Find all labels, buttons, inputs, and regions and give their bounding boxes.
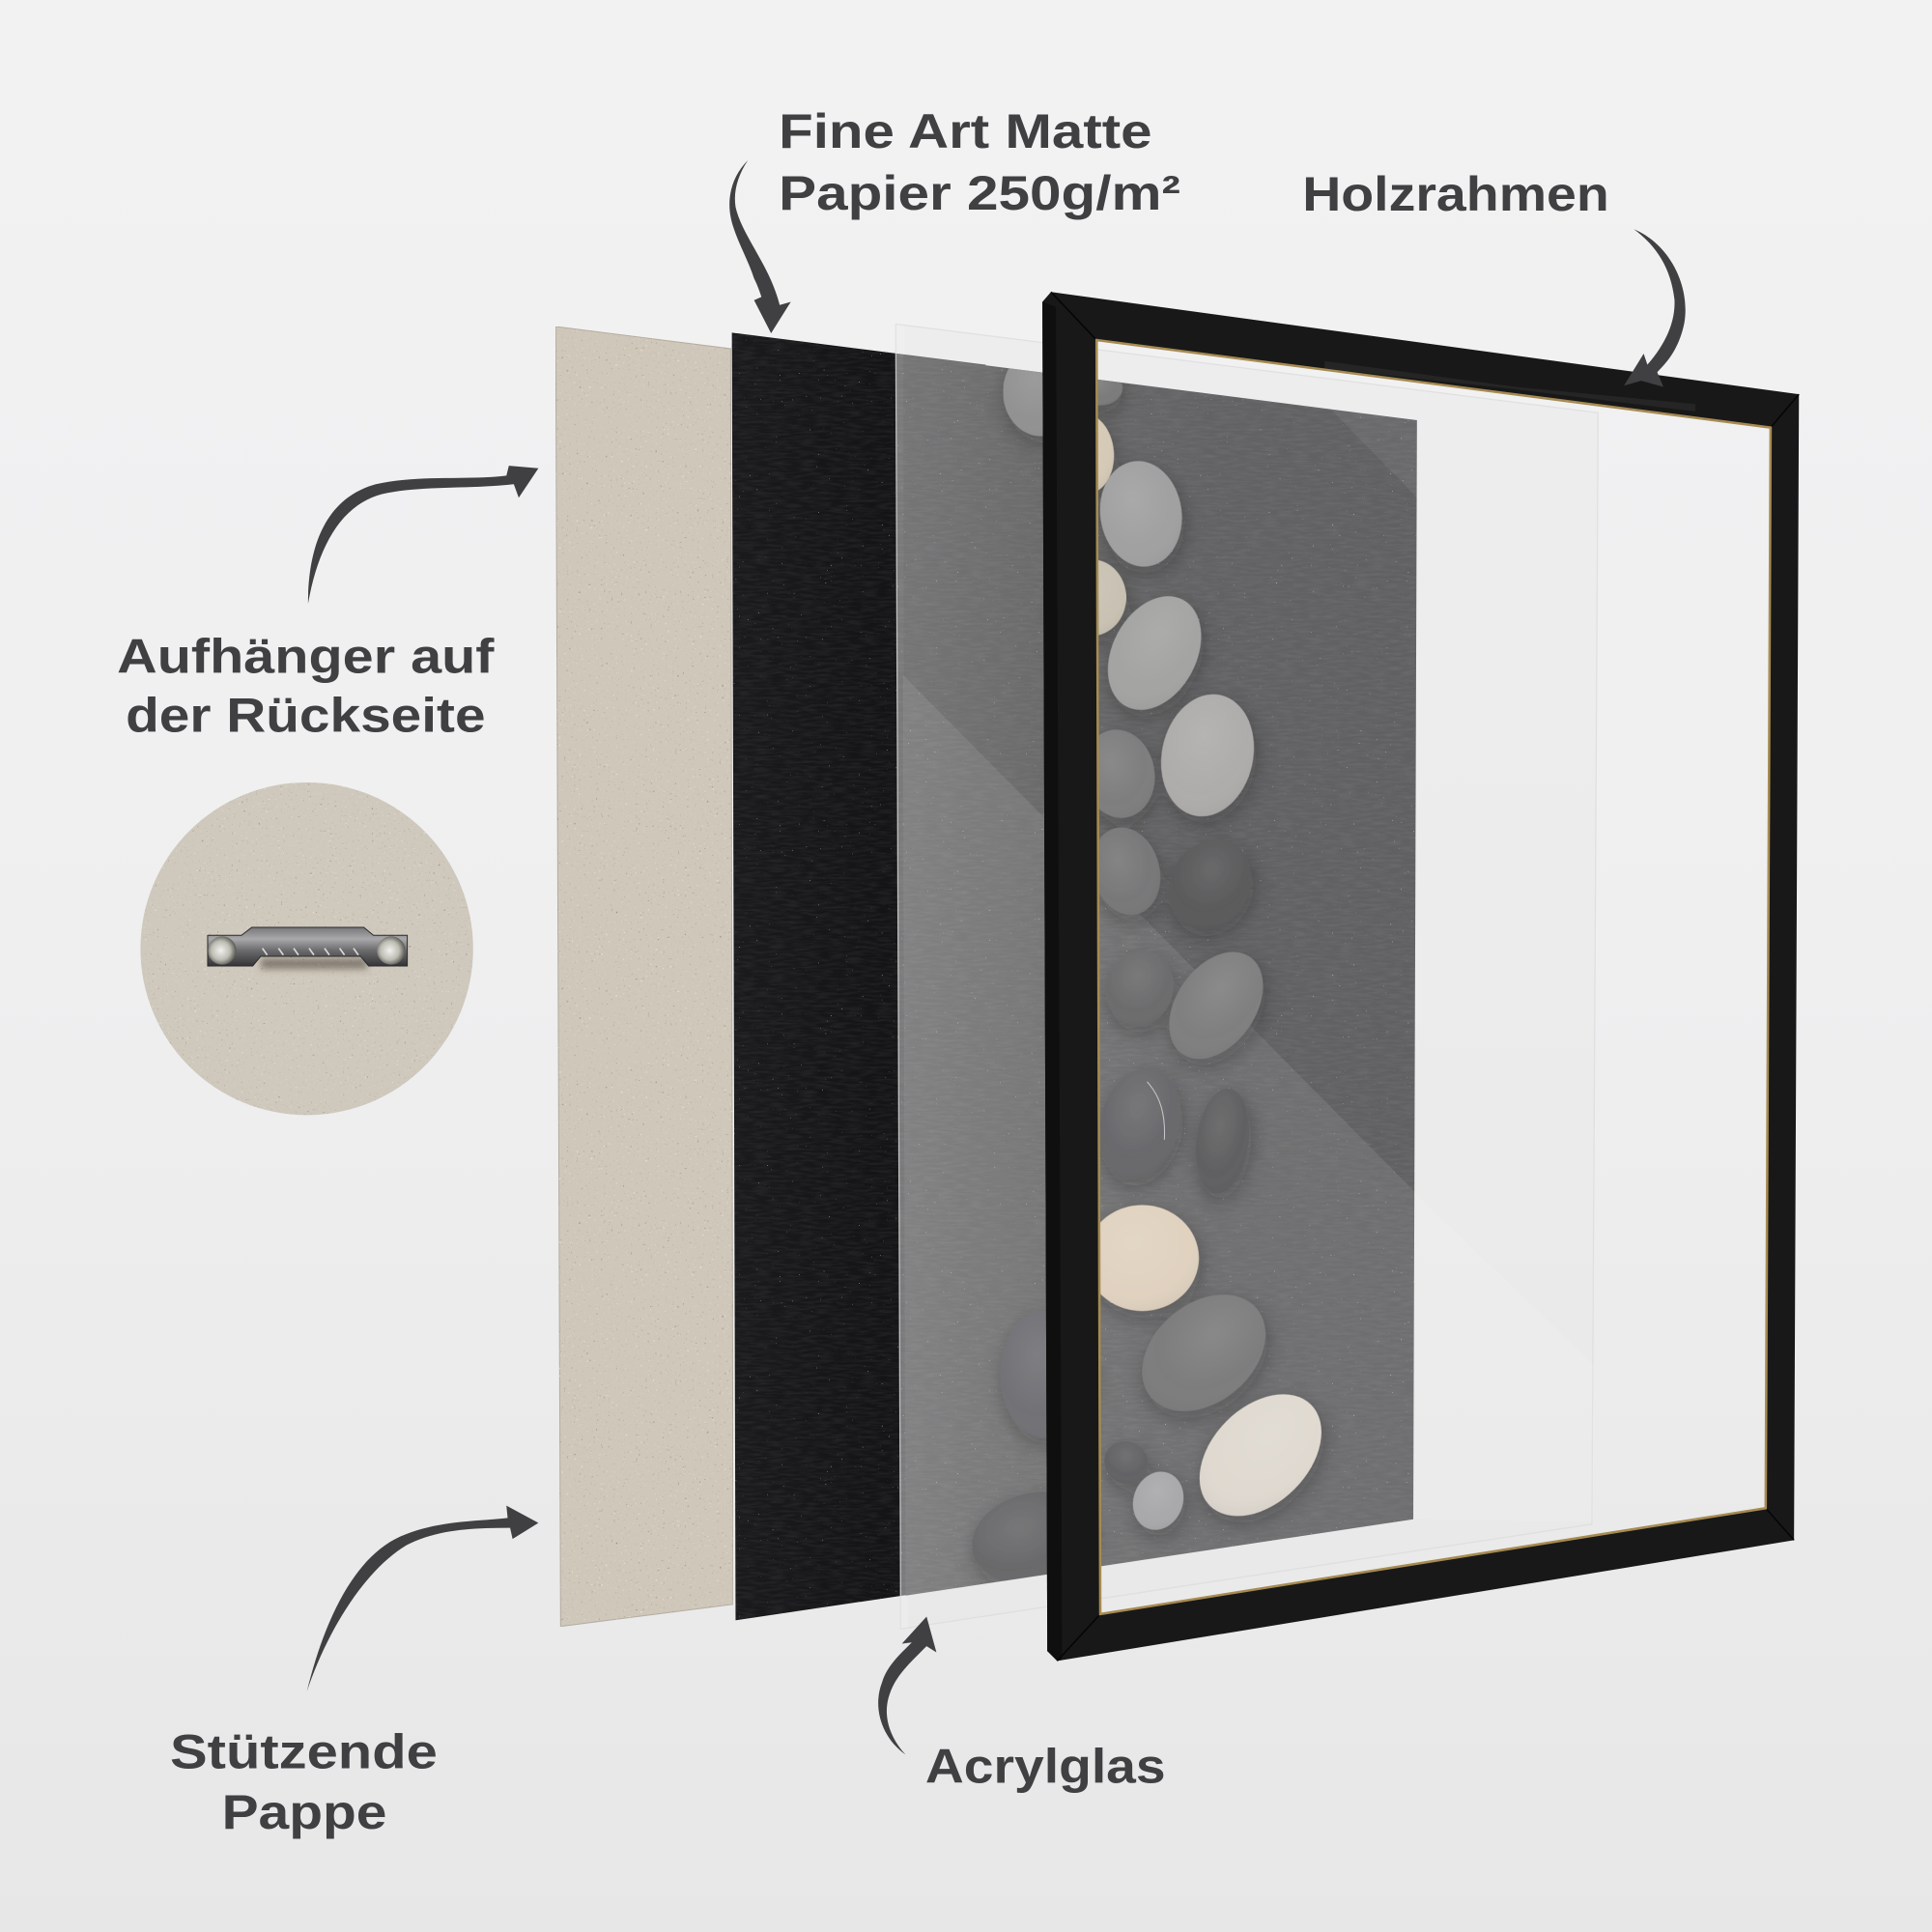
heading: Fine Art Matte Papier: Fine Art Matte — [779, 104, 1152, 158]
heading: Stützende Pappe: Pappe — [222, 1785, 387, 1839]
arrow: Fine Art Matte — [729, 160, 791, 333]
heading: Fine Art Matte Papier — [779, 104, 1180, 220]
panel: supporting cardboard sheet — [555, 327, 733, 1627]
frame left outer face — [1042, 301, 1062, 1661]
heading: Stützende Pappe — [170, 1724, 438, 1839]
heading: Aufhänger auf der Rückseite: der Rückseite — [126, 689, 486, 743]
pebbles on artwork — [961, 348, 1345, 1597]
arrow: Holzrahmen — [1624, 229, 1686, 387]
faint reflection on white mat — [1413, 1195, 1595, 1521]
pebble crack — [1148, 1082, 1165, 1140]
panel: acrylic glass sheet — [895, 324, 1598, 1629]
heading: Holzrahmen: Holzrahmen — [1302, 167, 1609, 221]
panel: black fine art paper uncovered part — [732, 332, 985, 1620]
heading: Stützende Pappe: Stützende — [170, 1724, 438, 1778]
frame wood inner lining — [1096, 340, 1771, 1614]
arrow: Stützende Pappe — [307, 1506, 538, 1691]
heading: Acrylglas: Acrylglas — [925, 1740, 1166, 1794]
panel: printed artwork seen through acrylic — [903, 355, 1417, 1596]
heading: Aufhänger auf der Rückseite — [117, 629, 495, 743]
detail circle: hanger on back — [140, 782, 473, 1115]
arrow: Aufhänger — [308, 466, 538, 604]
icon: sawtooth hanger — [208, 927, 408, 969]
corner reflection on artwork — [1331, 409, 1417, 497]
reflection on artwork — [903, 675, 1416, 1596]
heading: Aufhänger auf der Rückseite: Aufhänger auf — [117, 629, 495, 683]
heading: Fine Art Matte Papier: Papier 250g/m² — [779, 166, 1180, 220]
picture frame — [1042, 292, 1799, 1661]
arrow: Acrylglas — [878, 1616, 936, 1754]
frame reflections — [1324, 361, 1695, 412]
frame mitre joints — [1051, 292, 1799, 1661]
